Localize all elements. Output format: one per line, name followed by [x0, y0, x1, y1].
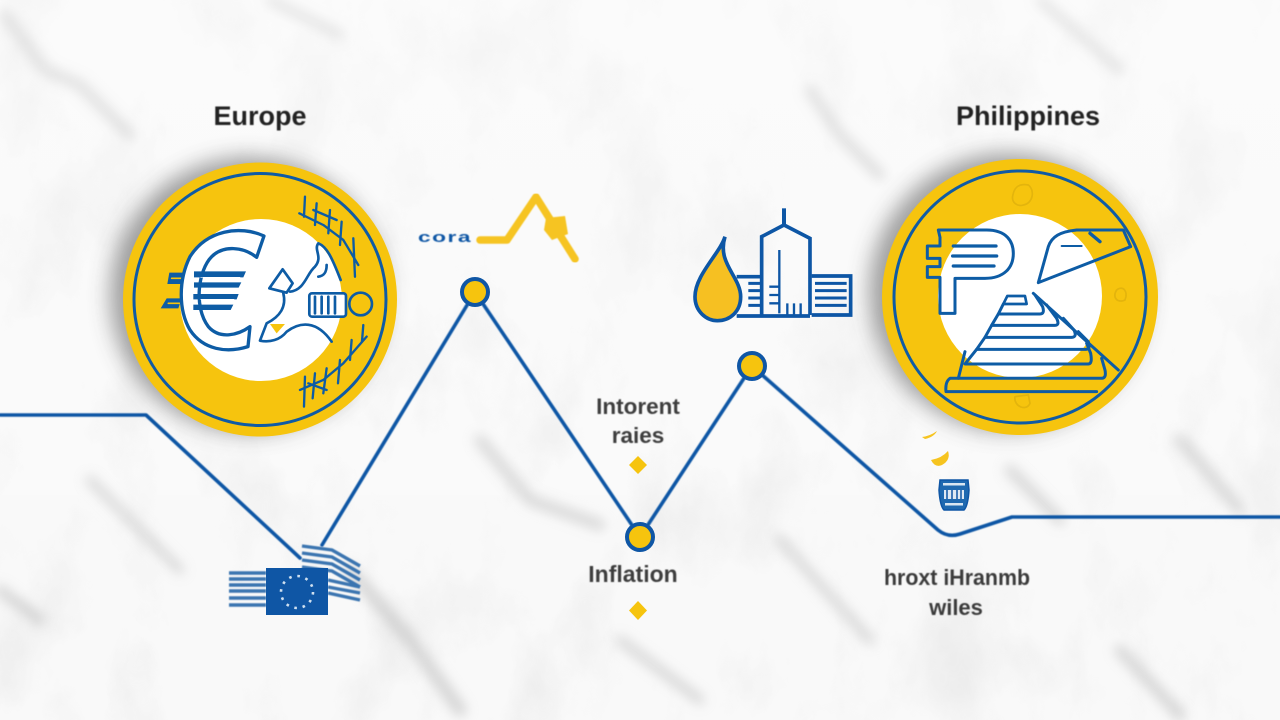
label: interest rates: raies — [612, 423, 664, 448]
icon: oil drop and city building — [695, 208, 851, 321]
building slats — [229, 546, 360, 605]
marker: right peak — [739, 353, 765, 379]
icon: eagle — [1038, 230, 1131, 283]
trend line — [0, 292, 1280, 558]
icon: diamond lower — [629, 601, 647, 620]
icon: diamond upper — [629, 456, 647, 474]
marker: center valley — [627, 524, 653, 550]
EU flag — [266, 568, 328, 615]
icon: map and column illustration — [260, 243, 372, 342]
label: inflation: Inflation — [588, 561, 678, 587]
icon: yellow accent strokes — [922, 431, 949, 466]
heading: Europe: Europe — [213, 101, 307, 131]
label: interest rates: Intorent — [596, 394, 680, 419]
icon: twig bottom — [300, 325, 367, 407]
label: garbled rates caption: wiles — [928, 595, 983, 620]
coin: Europe — [110, 157, 397, 436]
icon: small blue badge — [939, 480, 969, 510]
coin: Philippines — [869, 153, 1158, 435]
icon: yellow price line with "cora" label — [418, 197, 575, 259]
icon: stepped pyramid — [946, 293, 1118, 392]
label: garbled rates caption: hroxt iHranmb — [884, 565, 1030, 590]
label: garbled rates caption — [884, 565, 1030, 620]
icon: EU building with flag — [229, 546, 360, 615]
icon: euro sign — [161, 231, 264, 350]
label: interest rates — [596, 394, 680, 448]
EU stars — [281, 576, 313, 608]
marker: upper left peak — [462, 279, 488, 305]
heading: Philippines: Philippines — [956, 101, 1100, 131]
icon: embossed marks — [1013, 185, 1126, 408]
icon: peso sign — [927, 230, 1013, 313]
icon: twig top — [299, 197, 358, 277]
label: cora: cora — [418, 229, 472, 246]
